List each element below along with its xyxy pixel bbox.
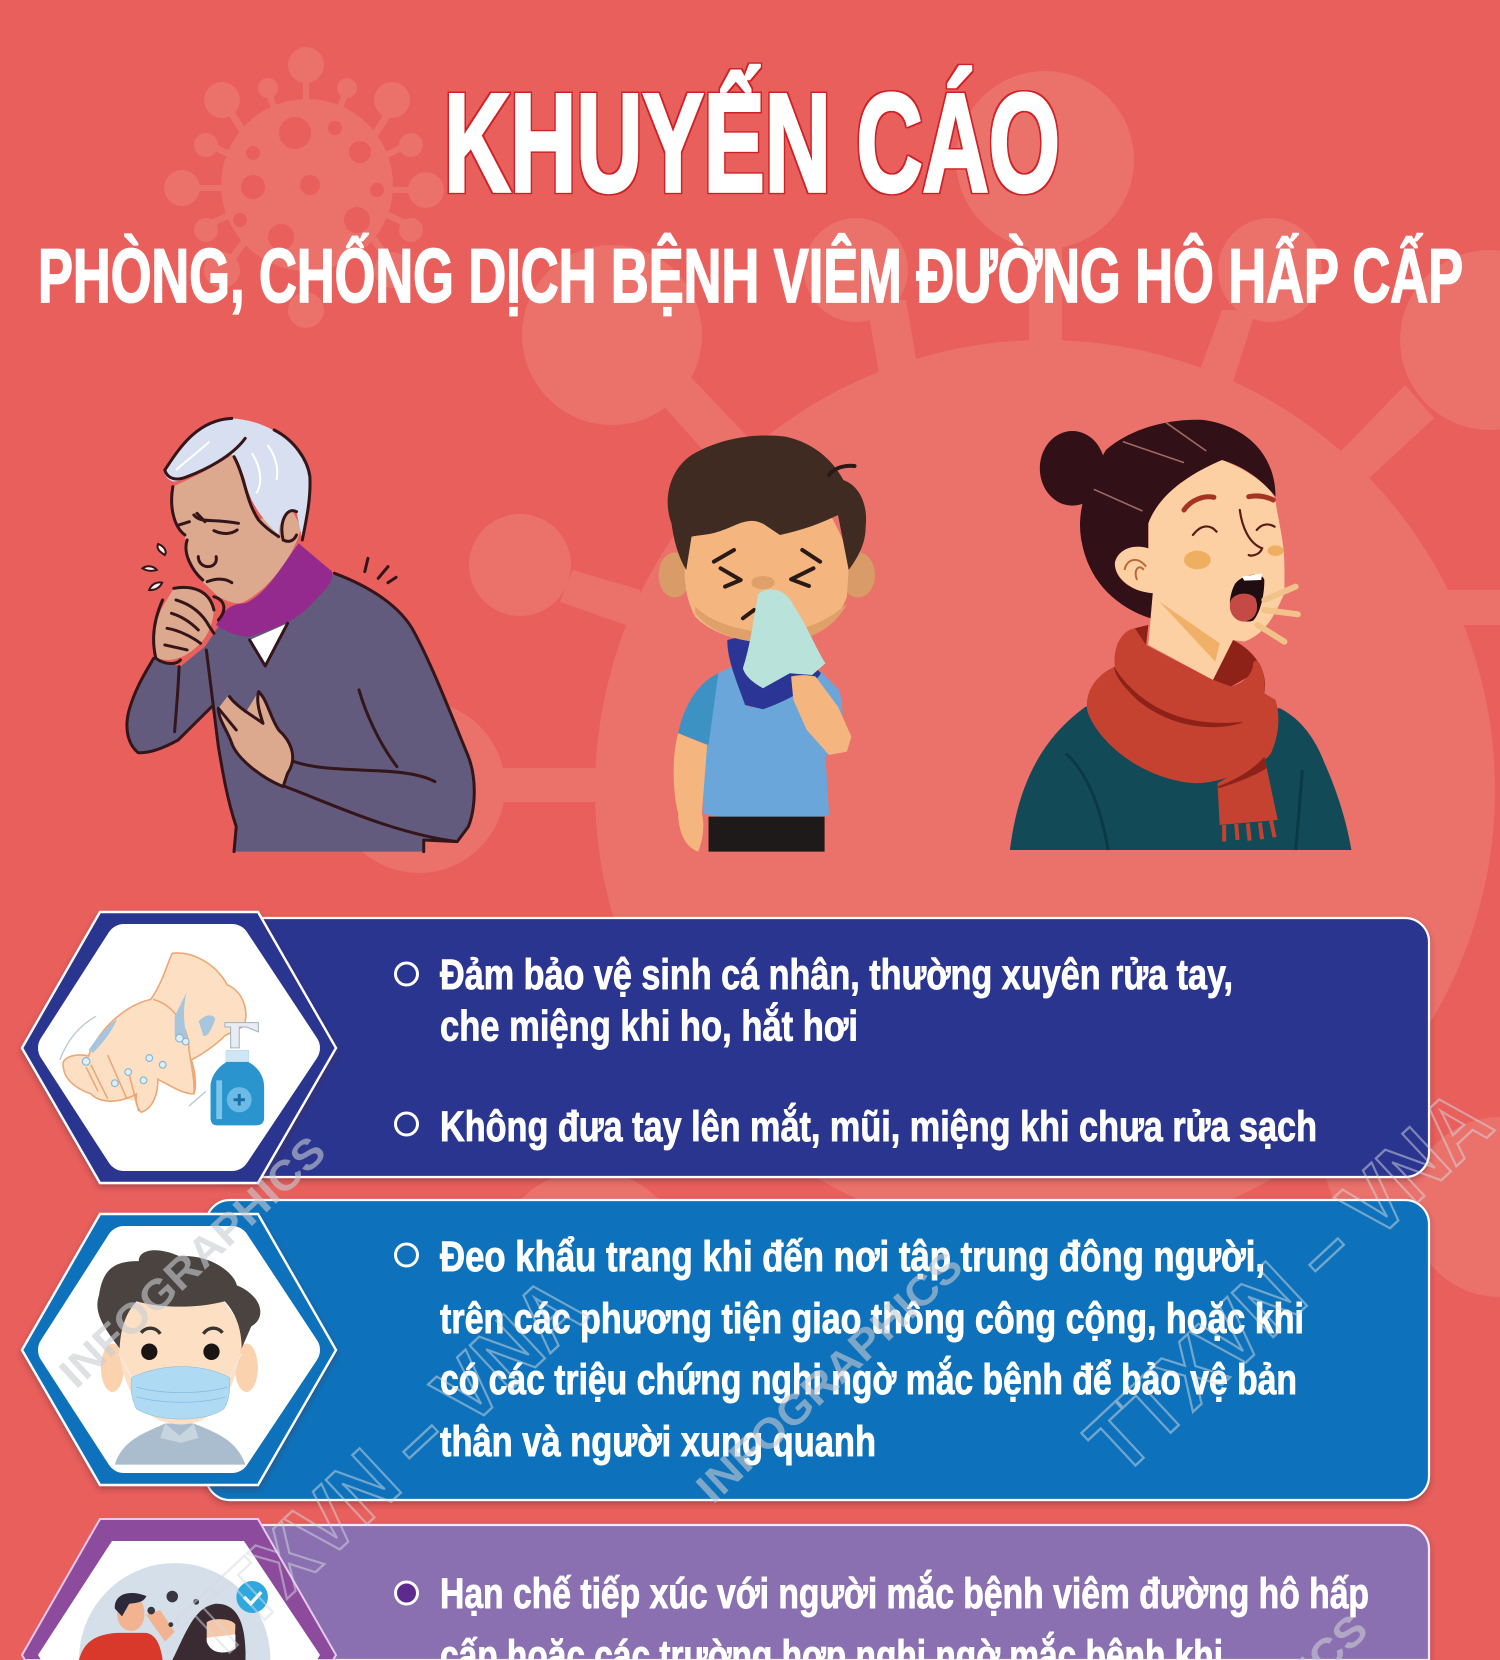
watermark: TTXVN - VNA [161,1070,1500,1660]
bullet [396,1244,418,1266]
small background virus [164,47,444,328]
text: mask line 4: thân và người xung quanh [440,1418,876,1466]
panel 2: masks [206,1200,1429,1500]
hexagon icon: hand washing [22,912,336,1183]
watermark: INFOGRAPHICS: INFOGRAPHICS [687,1242,971,1512]
title: KHUYẾN CÁO [444,64,1060,221]
large background virus [333,71,1500,1360]
illustration: elderly man coughing [127,418,474,852]
illustration: boy sneezing into tissue [659,436,875,852]
text: hygiene line 1: Đảm bảo vệ sinh cá nhân, thường xuyên rửa tay, [440,951,1233,999]
bullet [396,1113,418,1135]
hexagon icon: man wearing a mask [22,1214,336,1485]
illustration: woman sneezing with red scarf [1010,420,1351,850]
hexagon icon: avoid contact [22,1519,336,1660]
text: mask line 2: trên các phương tiện giao thông công cộng, hoặc khi [440,1295,1304,1343]
bullet [396,963,418,985]
text: mask line 1: Đeo khẩu trang khi đến nơi tập trung đông người, [440,1233,1265,1281]
text: hygiene line 2: che miệng khi ho, hắt hơi [440,1002,858,1050]
watermark: INFOGRAPHICS [50,1127,1376,1660]
watermark: INFOGRAPHICS: INFOGRAPHICS [50,1127,334,1397]
panel 1: personal hygiene [200,918,1429,1177]
panel 3: limit contact [200,1525,1429,1660]
bullet [396,1582,418,1604]
